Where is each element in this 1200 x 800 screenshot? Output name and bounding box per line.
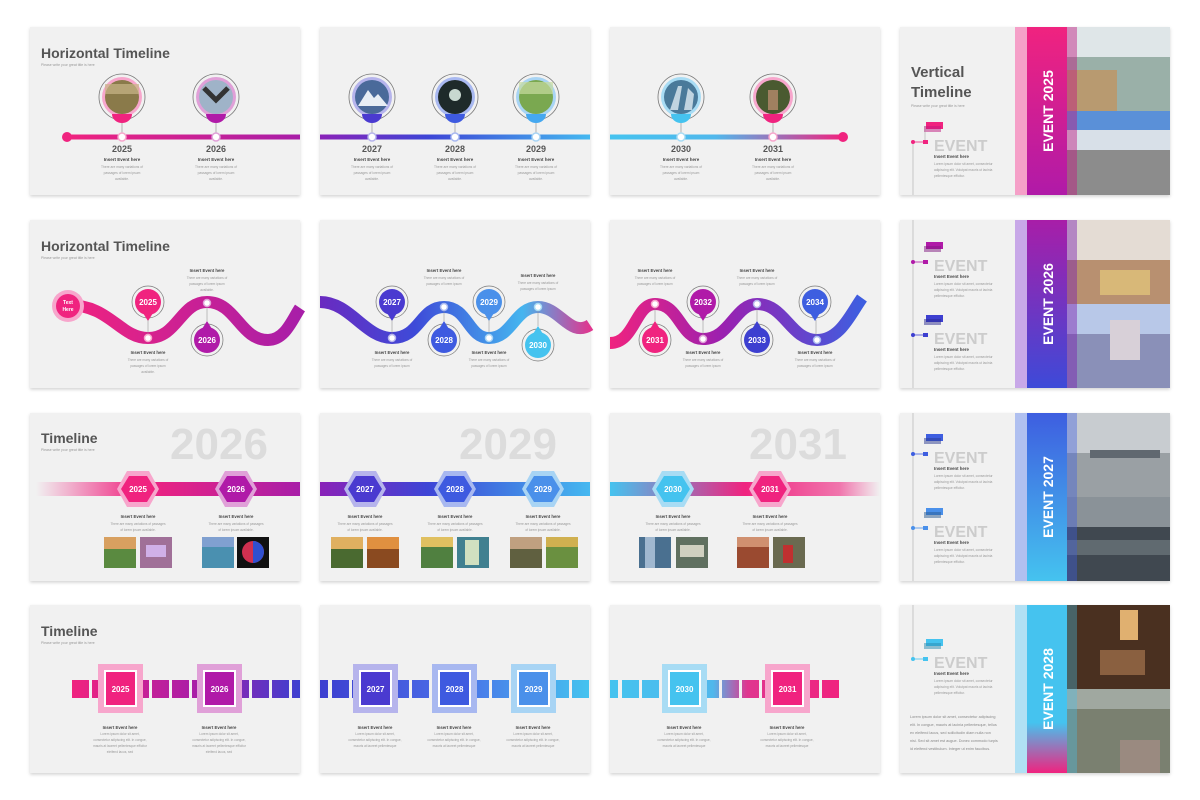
panel: vertical timeline event 2026: pellentesque efficitur. <box>934 367 965 371</box>
panel: row1 horizontal timeline 2: available. <box>529 177 543 181</box>
panel: row2 wave timeline 1: Insert Event here <box>190 268 225 273</box>
panel: row1 horizontal timeline 1: Please write your great title is here <box>41 63 95 67</box>
panel: row2 wave timeline 2: Insert Event here <box>472 350 507 355</box>
panel: row2 wave timeline 1: available. <box>200 288 214 292</box>
panel: row2 wave timeline 3: There are many variations of <box>737 276 777 280</box>
panel: vertical timeline event 2025: Vertical <box>911 64 964 81</box>
panel: vertical timeline event 2028: adipiscing elit. Volutpat mauris ut lacinia <box>934 685 992 689</box>
panel: row4 squares timeline 1: Lorem ipsum dolor sit amet, <box>100 732 140 736</box>
panel: row3 hexagon timeline 1: of lorem ipsum available. <box>218 528 254 532</box>
panel: row3 hexagon timeline 2: 2027 <box>356 485 374 494</box>
panel: row4 squares timeline 3: Lorem ipsum dolor sit amet, <box>664 732 704 736</box>
panel: row2 wave timeline 3 <box>610 268 862 368</box>
panel: row3 hexagon timeline 2: There are many variations of passages <box>515 522 571 526</box>
panel: row3 hexagon timeline 1 <box>36 420 300 568</box>
panel: row3 hexagon timeline 1: 2026 <box>170 420 268 469</box>
panel: vertical timeline event 2028: pellentesque efficitur. <box>934 691 965 695</box>
panel: row4 squares timeline 2: Lorem ipsum dolor sit amet, <box>513 732 553 736</box>
panel: vertical timeline event 2027: EVENT <box>934 450 988 467</box>
panel: vertical timeline event 2025: Timeline <box>911 84 972 101</box>
panel: row1 horizontal timeline 1: There are many variations of <box>195 165 237 169</box>
panel: row2 wave timeline 1: 2025 <box>139 298 157 307</box>
panel: row1 horizontal timeline 1: available. <box>115 177 129 181</box>
panel: row2 wave timeline 3: passages of lorem ipsum <box>685 364 721 368</box>
panel: row3 hexagon timeline 3: Insert Event here <box>753 514 788 519</box>
panel: row2 wave timeline 2: 2029 <box>480 298 498 307</box>
panel: vertical timeline event 2026: EVENT <box>934 258 988 275</box>
panel: row4 squares timeline 1: Lorem ipsum dolor sit amet, <box>199 732 239 736</box>
panel: row4 squares timeline 2 <box>320 664 589 748</box>
panel: vertical timeline event 2028: Insert Event here <box>934 671 969 676</box>
panel: row2 wave timeline 3: 2033 <box>748 336 766 345</box>
panel: row4 squares timeline 2: Insert Event here <box>516 725 551 730</box>
panel: row2 wave timeline 3: There are many variations of <box>635 276 675 280</box>
panel: row4 squares timeline 2: consectetur adipiscing elit. In congue, <box>506 738 560 742</box>
panel: vertical timeline event 2027: adipiscing elit. Volutpat mauris ut lacinia <box>934 554 992 558</box>
panel: row2 wave timeline 3: passages of lorem ipsum <box>739 282 775 286</box>
panel: vertical timeline event 2028: EVENT <box>934 655 988 672</box>
panel: row1 horizontal timeline 3: Insert Event here <box>663 157 700 162</box>
panel: row3 hexagon timeline 3: of lorem ipsum available. <box>752 528 788 532</box>
panel: row3 hexagon timeline 3: of lorem ipsum available. <box>655 528 691 532</box>
panel: vertical timeline event 2027: Lorem ipsum dolor sit amet, consectetur <box>934 548 994 552</box>
panel: row2 wave timeline 1: Please write your great title is here <box>41 256 95 260</box>
panel: vertical timeline event 2026: pellentesque efficitur. <box>934 294 965 298</box>
panel: row3 hexagon timeline 1: Timeline <box>41 430 98 446</box>
panel: row2 wave timeline 2: There are many variations of <box>372 358 412 362</box>
panel: row4 squares timeline 2: 2029 <box>525 685 543 694</box>
panel: row3 hexagon timeline 3: There are many variations of passages <box>645 522 701 526</box>
panel: row4 squares timeline 1: mauris at laoreet pellentesque efficitur <box>192 744 247 748</box>
panel: row2 wave timeline 1: passages of lorem ipsum <box>189 282 225 286</box>
panel: row1 horizontal timeline 2: There are many variations of <box>351 165 393 169</box>
panel: row1 horizontal timeline 1: Insert Event here <box>198 157 235 162</box>
panel: vertical timeline event 2027: Lorem ipsum dolor sit amet, consectetur <box>934 474 994 478</box>
panel: row2 wave timeline 1: 2026 <box>198 336 216 345</box>
panel: row1 horizontal timeline 3: available. <box>766 177 780 181</box>
panel: row2 wave timeline 3: 2034 <box>806 298 824 307</box>
panel: row1 horizontal timeline 2: 2027 <box>362 144 382 154</box>
panel: row1 horizontal timeline 2: Insert Event here <box>518 157 555 162</box>
panel: row4 squares timeline 1: 2026 <box>211 685 229 694</box>
panel: vertical timeline event 2027: adipiscing elit. Volutpat mauris ut lacinia <box>934 480 992 484</box>
panel: row4 squares timeline 1: Insert Event here <box>202 725 237 730</box>
panel: row1 horizontal timeline 3: passages of lorem ipsum <box>663 171 700 175</box>
panel: row4 squares timeline 1: consectetur adipiscing elit. In congue, <box>93 738 147 742</box>
panel: row4 squares timeline 2: 2028 <box>446 685 464 694</box>
panel: vertical timeline event 2026: adipiscing elit. Volutpat mauris ut lacinia <box>934 361 992 365</box>
panel: row3 hexagon timeline 3: Insert Event here <box>656 514 691 519</box>
panel: row2 wave timeline 2: passages of lorem ipsum <box>471 364 507 368</box>
panel: row2 wave timeline 3: 2031 <box>646 336 664 345</box>
panel: row4 squares timeline 1: Please write your great title is here <box>41 641 95 645</box>
panel: vertical timeline event 2025: Please write your great title is here <box>911 104 965 108</box>
panel: row3 hexagon timeline 2: of lorem ipsum available. <box>525 528 561 532</box>
panel: vertical timeline event 2027: pellentesque efficitur. <box>934 486 965 490</box>
panel: vertical timeline event 2026: Lorem ipsum dolor sit amet, consectetur <box>934 355 994 359</box>
panel: row3 hexagon timeline 2: Insert Event here <box>526 514 561 519</box>
panel: vertical timeline event 2027: EVENT <box>934 524 988 541</box>
panel: row3 hexagon timeline 2 <box>320 420 590 568</box>
panel: row1 horizontal timeline 2: 2029 <box>526 144 546 154</box>
panel: row2 wave timeline 2: There are many variations of <box>424 276 464 280</box>
panel: row1 horizontal timeline 2: passages of lorem ipsum <box>518 171 555 175</box>
panel: row4 squares timeline 3 <box>610 664 839 748</box>
panel: row2 wave timeline 1: available. <box>141 370 155 374</box>
panel: row4 squares timeline 1: Timeline <box>41 623 98 639</box>
panel: row1 horizontal timeline 1: passages of lorem ipsum <box>104 171 141 175</box>
panel: row2 wave timeline 1: Text <box>63 300 73 306</box>
panel: row4 squares timeline 1: Insert Event here <box>103 725 138 730</box>
panel: row2 wave timeline 2: Insert Event here <box>375 350 410 355</box>
panel: row2 wave timeline 1: There are many variations of <box>187 276 227 280</box>
panel: row4 squares timeline 2: Insert Event here <box>358 725 393 730</box>
panel: row1 horizontal timeline 3: passages of lorem ipsum <box>755 171 792 175</box>
panel: row4 squares timeline 2: Lorem ipsum dolor sit amet, <box>434 732 474 736</box>
panel: row1 horizontal timeline 1: 2025 <box>112 144 132 154</box>
panel: row1 horizontal timeline 3: Insert Event here <box>755 157 792 162</box>
panel: row3 hexagon timeline 1: There are many variations of passages <box>110 522 166 526</box>
panel: row4 squares timeline 3: Lorem ipsum dolor sit amet, <box>767 732 807 736</box>
panel: vertical timeline event 2026: adipiscing elit. Volutpat mauris ut lacinia <box>934 288 992 292</box>
panel: row1 horizontal timeline 2: available. <box>448 177 462 181</box>
panel: row3 hexagon timeline 3: There are many variations of passages <box>742 522 798 526</box>
panel: row2 wave timeline 2: passages of lorem ipsum <box>374 364 410 368</box>
panel: vertical timeline event 2028: Lorem ipsum dolor sit amet, consectetur <box>934 679 994 683</box>
panel: row2 wave timeline 1: passages of lorem ipsum <box>130 364 166 368</box>
panel: row4 squares timeline 2: mauris at laoreet pellentesque <box>433 744 476 748</box>
panel: vertical timeline event 2025: pellentesque efficitur. <box>934 174 965 178</box>
panel: row1 horizontal timeline 3: There are many variations of <box>752 165 794 169</box>
panel: vertical timeline event 2025: adipiscing elit. Volutpat mauris ut lacinia <box>934 168 992 172</box>
panel: row2 wave timeline 3: Insert Event here <box>740 268 775 273</box>
panel: row2 wave timeline 2: There are many variations of <box>469 358 509 362</box>
panel: vertical timeline event 2027: EVENT 2027 <box>1040 456 1056 538</box>
panel: vertical timeline event 2025: EVENT <box>934 138 988 155</box>
panel: row4 squares timeline 1: consectetur adipiscing elit. In congue, <box>192 738 246 742</box>
panel: vertical timeline event 2026: Insert Event here <box>934 347 969 352</box>
panel: row3 hexagon timeline 1: 2026 <box>227 485 245 494</box>
panel: row3 hexagon timeline 1: There are many variations of passages <box>208 522 264 526</box>
panel: row1 horizontal timeline 3: 2031 <box>763 144 783 154</box>
panel: row4 squares timeline 1: eleifend lacus, sed <box>206 750 232 754</box>
panel: row4 squares timeline 2: Lorem ipsum dolor sit amet, <box>355 732 395 736</box>
panel: row2 wave timeline 2: passages of lorem ipsum <box>426 282 462 286</box>
panel: vertical timeline event 2026: EVENT <box>934 331 988 348</box>
panel: row2 wave timeline 3: passages of lorem ipsum <box>797 364 833 368</box>
panel: row3 hexagon timeline 2: of lorem ipsum available. <box>437 528 473 532</box>
panel: vertical timeline event 2026: Insert Event here <box>934 274 969 279</box>
panel: row2 wave timeline 2: 2027 <box>383 298 401 307</box>
panel: row2 wave timeline 1 <box>41 238 300 374</box>
panel: vertical timeline event 2028: ex eleifend lacus, sed sollicitudin diam nulla non <box>910 731 991 735</box>
panel: row1 horizontal timeline 2: Insert Event here <box>437 157 474 162</box>
panel: row3 hexagon timeline 1: Insert Event here <box>121 514 156 519</box>
panel: row4 squares timeline 3: 2031 <box>779 685 797 694</box>
panel: row1 horizontal timeline 1: available. <box>209 177 223 181</box>
panel: row1 horizontal timeline 2: available. <box>365 177 379 181</box>
panel: row4 squares timeline 2: consectetur adipiscing elit. In congue, <box>348 738 402 742</box>
panel: row1 horizontal timeline 1: passages of lorem ipsum <box>198 171 235 175</box>
panel: row2 wave timeline 3: passages of lorem ipsum <box>637 282 673 286</box>
panel: row3 hexagon timeline 2: Insert Event here <box>348 514 383 519</box>
panel: vertical timeline event 2025: Lorem ipsum dolor sit amet, consectetur <box>934 162 994 166</box>
panel: vertical timeline event 2027: Insert Event here <box>934 540 969 545</box>
panel: row3 hexagon timeline 2: There are many variations of passages <box>427 522 483 526</box>
panel: row4 squares timeline 2: 2027 <box>367 685 385 694</box>
panel: row2 wave timeline 3: Insert Event here <box>686 350 721 355</box>
panel: row1 horizontal timeline 2 <box>320 74 590 181</box>
panel: row1 horizontal timeline 1: There are many variations of <box>101 165 143 169</box>
panel: vertical timeline event 2028: EVENT 2028 <box>1040 648 1056 730</box>
panel: vertical timeline event 2026 <box>911 220 1170 388</box>
panel: vertical timeline event 2028: nisi. Sed sit amet est augue. Donec commodo turpis <box>910 739 998 743</box>
panel: row3 hexagon timeline 2: of lorem ipsum available. <box>347 528 383 532</box>
panel: row4 squares timeline 1: mauris at laoreet pellentesque efficitur <box>93 744 148 748</box>
panel: row2 wave timeline 2: passages of lorem ipsum <box>520 287 556 291</box>
panel: vertical timeline event 2025 <box>911 27 1170 195</box>
panel: row3 hexagon timeline 3 <box>610 420 880 568</box>
panel: row2 wave timeline 1: Horizontal Timeline <box>41 238 170 254</box>
panel: row3 hexagon timeline 3: 2031 <box>749 420 847 469</box>
panel: row1 horizontal timeline 2: passages of lorem ipsum <box>354 171 391 175</box>
panel: row4 squares timeline 2: Insert Event here <box>437 725 472 730</box>
panel: vertical timeline event 2025: EVENT 2025 <box>1040 70 1056 152</box>
panel: row2 wave timeline 1: Insert Event here <box>131 350 166 355</box>
panel: row3 hexagon timeline 2: Insert Event here <box>438 514 473 519</box>
panel: row4 squares timeline 3: mauris at laoreet pellentesque <box>766 744 809 748</box>
panel: row3 hexagon timeline 1: Insert Event here <box>219 514 254 519</box>
panel: row1 horizontal timeline 1: Horizontal Timeline <box>41 45 170 61</box>
panel: row2 wave timeline 1: Here <box>62 307 74 313</box>
panel: vertical timeline event 2027 <box>911 413 1170 581</box>
panel: row3 hexagon timeline 1: Please write your great title is here <box>41 448 95 452</box>
panel: row1 horizontal timeline 2: passages of lorem ipsum <box>437 171 474 175</box>
panel: row4 squares timeline 1 <box>41 623 300 754</box>
panel: row3 hexagon timeline 2: 2028 <box>446 485 464 494</box>
panel: row4 squares timeline 1: 2025 <box>112 685 130 694</box>
panel: row2 wave timeline 2 <box>320 268 590 368</box>
panel: vertical timeline event 2027: Insert Event here <box>934 466 969 471</box>
panel: vertical timeline event 2027: pellentesque efficitur. <box>934 560 965 564</box>
panel: row2 wave timeline 3: 2032 <box>694 298 712 307</box>
panel: row2 wave timeline 3: Insert Event here <box>798 350 833 355</box>
panel: row2 wave timeline 3: Insert Event here <box>638 268 673 273</box>
panel: row4 squares timeline 2: mauris at laoreet pellentesque <box>512 744 555 748</box>
panel: row4 squares timeline 1: eleifend lacus, sed <box>107 750 133 754</box>
panel: row1 horizontal timeline 3 <box>610 74 848 181</box>
panel: vertical timeline event 2028: Lorem ipsum dolor sit amet, consectetur adipiscing <box>910 715 995 719</box>
panel: row1 horizontal timeline 1 <box>41 45 300 181</box>
panel: row4 squares timeline 3: consectetur adipiscing elit. In congue, <box>760 738 814 742</box>
panel: row4 squares timeline 3: 2030 <box>676 685 694 694</box>
panel: row2 wave timeline 2: Insert Event here <box>521 273 556 278</box>
panel: row1 horizontal timeline 2: There are many variations of <box>434 165 476 169</box>
panel: row1 horizontal timeline 3: 2030 <box>671 144 691 154</box>
panel: row1 horizontal timeline 3: available. <box>674 177 688 181</box>
panel: row3 hexagon timeline 2: 2029 <box>534 485 552 494</box>
panel: row1 horizontal timeline 2: There are many variations of <box>515 165 557 169</box>
panel: row2 wave timeline 3: There are many variations of <box>795 358 835 362</box>
panel: row1 horizontal timeline 1: Insert Event here <box>104 157 141 162</box>
panel: vertical timeline event 2028 <box>910 605 1170 773</box>
panel: row4 squares timeline 2: mauris at laoreet pellentesque <box>354 744 397 748</box>
panel: row1 horizontal timeline 2: Insert Event here <box>354 157 391 162</box>
panel: vertical timeline event 2026: Lorem ipsum dolor sit amet, consectetur <box>934 282 994 286</box>
panel: row3 hexagon timeline 2: 2029 <box>459 420 557 469</box>
panel: row4 squares timeline 3: Insert Event here <box>667 725 702 730</box>
panel: row2 wave timeline 2: 2030 <box>529 341 547 350</box>
panel: vertical timeline event 2026: EVENT 2026 <box>1040 263 1056 345</box>
panel: row2 wave timeline 3: There are many variations of <box>683 358 723 362</box>
panel: row1 horizontal timeline 1: 2026 <box>206 144 226 154</box>
panel: row4 squares timeline 3: consectetur adipiscing elit. In congue, <box>657 738 711 742</box>
panel: row2 wave timeline 2: 2028 <box>435 336 453 345</box>
panel: row2 wave timeline 1: There are many variations of <box>128 358 168 362</box>
panel: vertical timeline event 2028: id eleifend vestibulum. Integer ut enim faucibus. <box>910 747 990 751</box>
panel: row3 hexagon timeline 1: 2025 <box>129 485 147 494</box>
panel: row3 hexagon timeline 3: 2031 <box>761 485 779 494</box>
panel: row1 horizontal timeline 2: 2028 <box>445 144 465 154</box>
panel: row3 hexagon timeline 3: 2030 <box>664 485 682 494</box>
panel: row4 squares timeline 3: Insert Event here <box>770 725 805 730</box>
panel: row2 wave timeline 2: There are many variations of <box>518 281 558 285</box>
panel: row3 hexagon timeline 1: of lorem ipsum available. <box>120 528 156 532</box>
panel: row1 horizontal timeline 3: There are many variations of <box>660 165 702 169</box>
panel: vertical timeline event 2028: elit. In congue, mauris at lacinia pellentesque, tellus <box>910 723 997 727</box>
panel: row4 squares timeline 2: consectetur adipiscing elit. In congue, <box>427 738 481 742</box>
panel: row2 wave timeline 2: Insert Event here <box>427 268 462 273</box>
panel: row4 squares timeline 3: mauris at laoreet pellentesque <box>663 744 706 748</box>
panel: vertical timeline event 2025: Insert Event here <box>934 154 969 159</box>
panel: row3 hexagon timeline 2: There are many variations of passages <box>337 522 393 526</box>
